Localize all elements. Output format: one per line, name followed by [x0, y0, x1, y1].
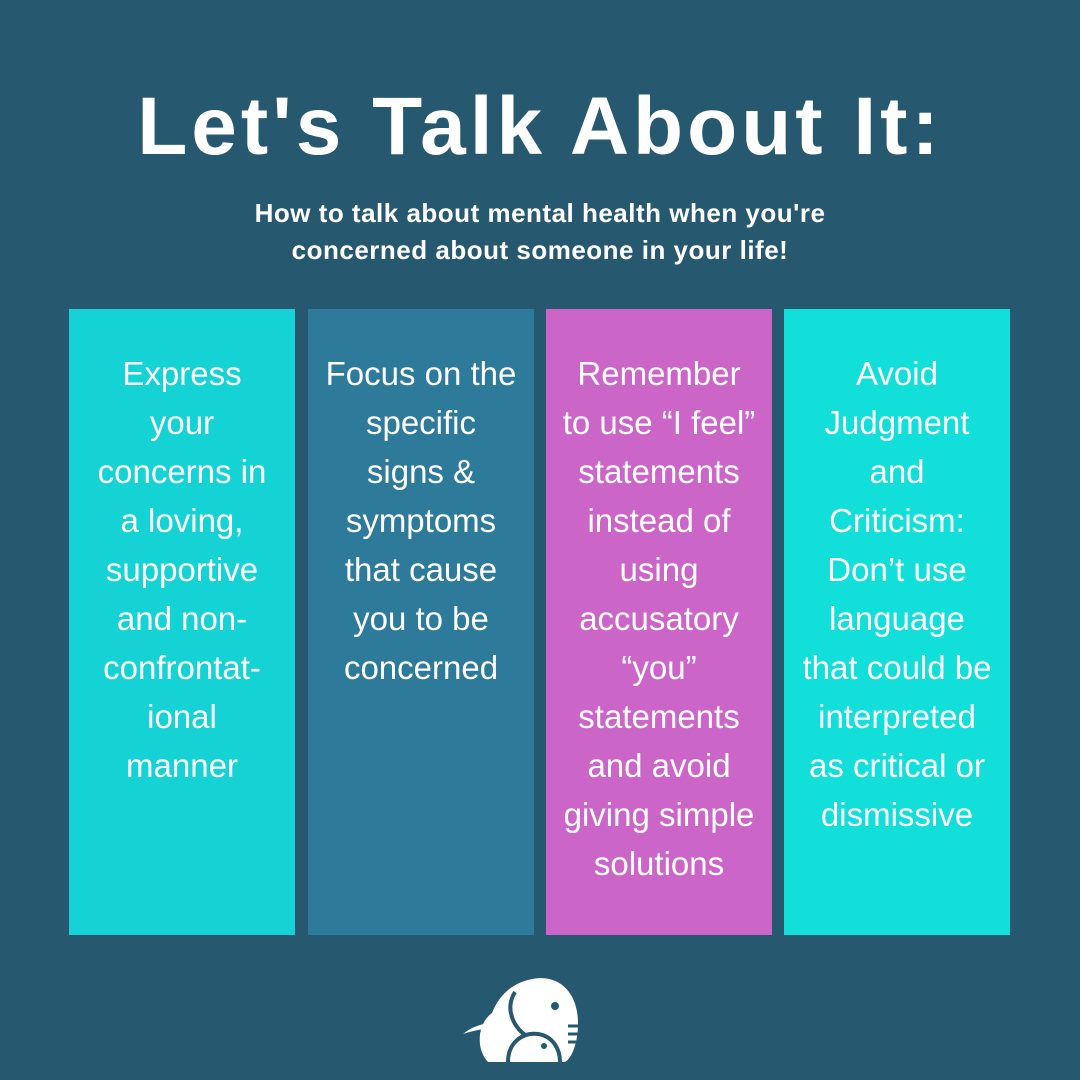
subtitle: concerned about someone in your life! [292, 235, 788, 265]
panel: avoid judgment: as critical or [809, 747, 985, 784]
panel: I feel statements: instead of [587, 502, 731, 539]
panel: avoid judgment: that could be [802, 649, 991, 686]
panel: focus on signs: symptoms [346, 502, 496, 539]
panel: express concerns: confrontat- [103, 649, 261, 686]
panel: focus on signs [308, 309, 534, 935]
panel: I feel statements: statements [578, 453, 740, 490]
panel: avoid judgment: Judgment [825, 404, 969, 441]
panel: express concerns: concerns in [98, 453, 266, 490]
subtitle: How to talk about mental health when you're [255, 198, 825, 228]
panel: I feel statements: to use “I feel” [563, 404, 755, 441]
panel: express concerns: ional [147, 698, 217, 735]
panel: I feel statements: solutions [594, 845, 724, 882]
panel: focus on signs: specific [366, 404, 476, 441]
panel: avoid judgment: Criticism: [829, 502, 965, 539]
panel: avoid judgment: interpreted [818, 698, 976, 735]
panel: avoid judgment: Avoid [856, 355, 938, 392]
panel: express concerns: and non- [117, 600, 247, 637]
panel: I feel statements: and avoid [587, 747, 731, 784]
panel: avoid judgment: dismissive [821, 796, 973, 833]
title: Let's Talk About It: [137, 81, 943, 172]
subtitle [255, 198, 825, 265]
panel: I feel statements: Remember [577, 355, 741, 392]
panel: I feel statements: accusatory [579, 600, 739, 637]
panel: focus on signs: you to be [353, 600, 489, 637]
panel: express concerns: supportive [106, 551, 258, 588]
panel: focus on signs: signs & [367, 453, 475, 490]
panel: avoid judgment: language [829, 600, 965, 637]
icon: elephant logo [463, 978, 578, 1062]
panel: focus on signs: Focus on the [326, 355, 516, 392]
panel: avoid judgment [784, 309, 1010, 935]
panel: express concerns: your [150, 404, 214, 441]
panel: I feel statements: using [620, 551, 698, 588]
panel: avoid judgment: Don’t use [827, 551, 967, 588]
panel: express concerns: a loving, [121, 502, 243, 539]
panel: I feel statements: giving simple [564, 796, 754, 833]
panel: I feel statements: statements [578, 698, 740, 735]
panel: focus on signs: that cause [345, 551, 497, 588]
panel: I feel statements [546, 309, 772, 935]
panel: express concerns: Express [122, 355, 242, 392]
panel: avoid judgment: and [869, 453, 925, 490]
panel: express concerns [69, 309, 295, 935]
panel: I feel statements: “you” [621, 649, 697, 686]
panel: focus on signs: concerned [344, 649, 498, 686]
panel: express concerns: manner [126, 747, 238, 784]
